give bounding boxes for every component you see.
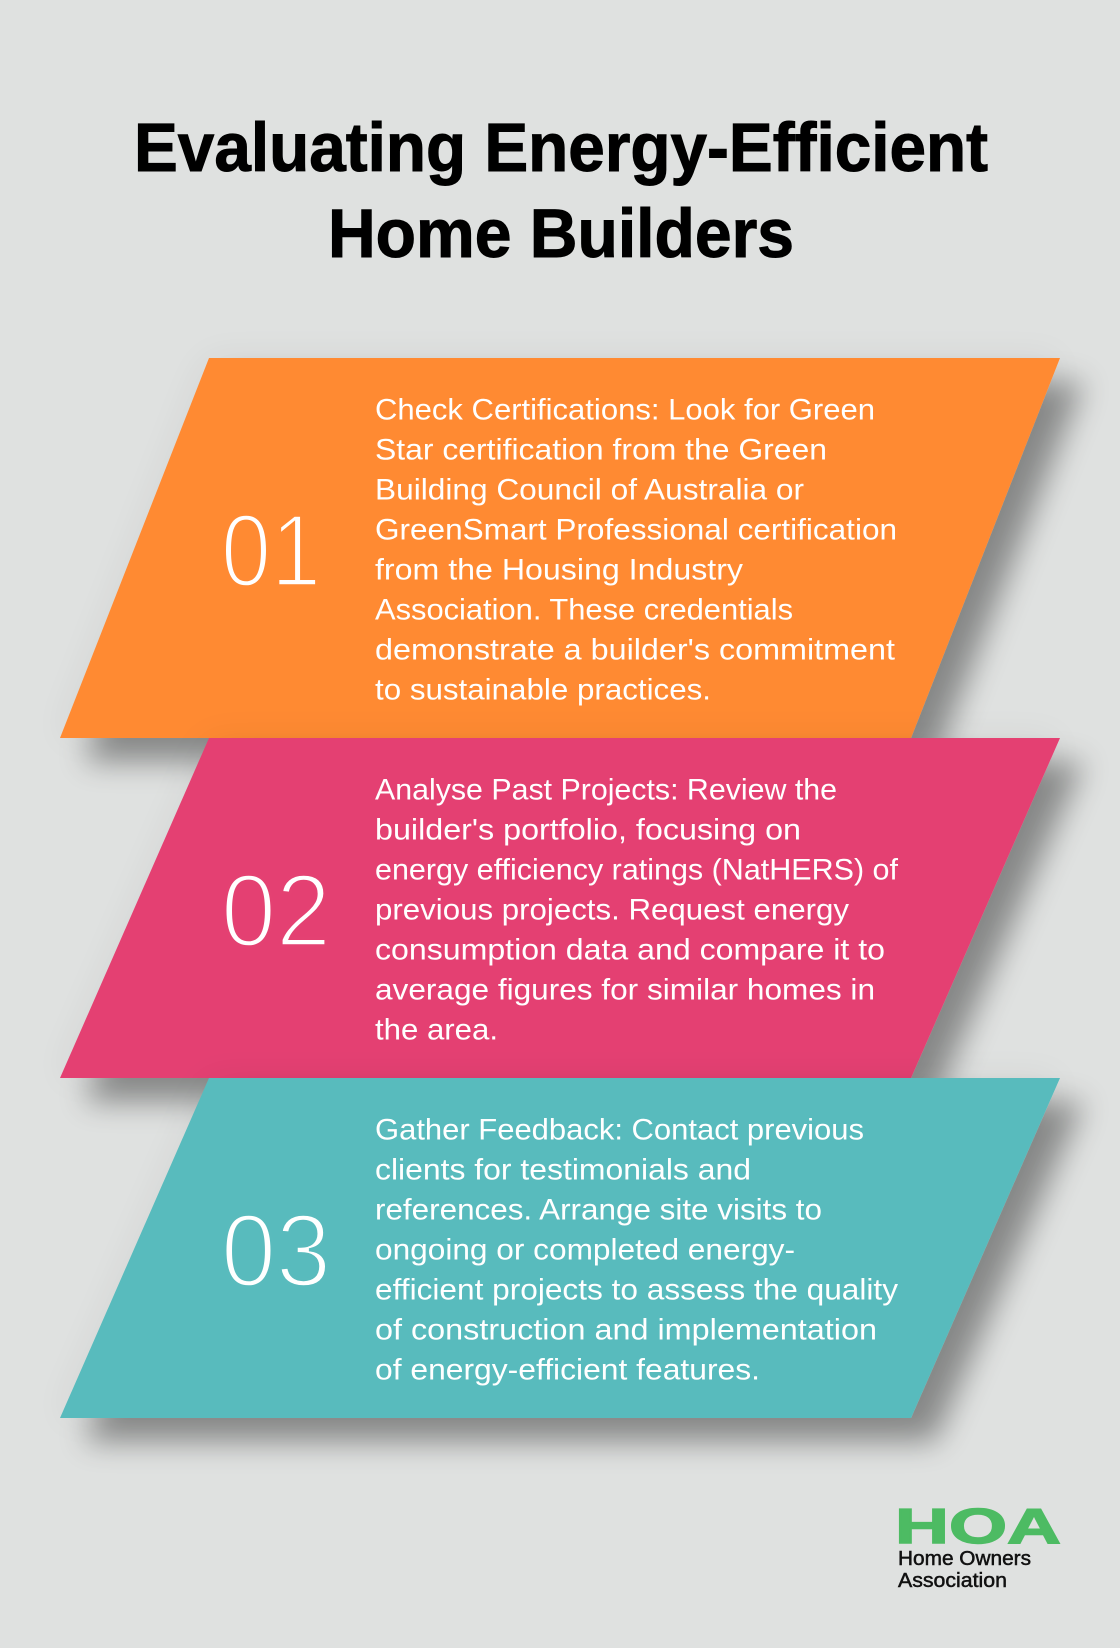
- logo: Home Owners Association: Association: [898, 1570, 1007, 1592]
- text: gather feedback: ongoing or completed energy-: [375, 1234, 795, 1266]
- logo: Home Owners Association: HOA: [895, 1500, 1061, 1554]
- text: analyse past projects: [375, 774, 899, 1046]
- text: analyse past projects: the area.: [375, 1014, 498, 1046]
- text: gather feedback: of energy-efficient features.: [375, 1354, 760, 1386]
- text: check certifications: Check Certifications: Look for Green: [375, 394, 875, 426]
- text: check certifications: GreenSmart Professional certification: [375, 514, 897, 546]
- text: check certifications: demonstrate a builder's commitment: [375, 634, 895, 666]
- text: analyse past projects: average figures for similar homes in: [375, 974, 875, 1006]
- number 02: 02: [221, 853, 331, 968]
- text: analyse past projects: consumption data and compare it to: [375, 934, 885, 966]
- text: check certifications: Building Council of Australia or: [375, 474, 804, 506]
- text: check certifications: Star certification from the Green: [375, 434, 827, 466]
- title: [134, 109, 988, 272]
- text: gather feedback: references. Arrange site visits to: [375, 1194, 822, 1226]
- panel: step 02 analyse past projects: [60, 738, 1060, 1078]
- text: check certifications: [375, 394, 897, 706]
- text: analyse past projects: builder's portfolio, focusing on: [375, 814, 801, 846]
- text: check certifications: to sustainable practices.: [375, 674, 711, 706]
- text: check certifications: Association. These credentials: [375, 594, 793, 626]
- number 01: 01: [221, 493, 321, 608]
- title: Home Builders: [328, 195, 794, 272]
- panel: step 01 check certifications: [60, 358, 1060, 738]
- text: gather feedback: efficient projects to assess the quality: [375, 1274, 898, 1306]
- text: gather feedback: Gather Feedback: Contact previous: [375, 1114, 864, 1146]
- orange parallelogram: [60, 358, 1060, 738]
- pink parallelogram: [60, 738, 1060, 1078]
- teal parallelogram: [60, 1078, 1060, 1418]
- text: gather feedback: of construction and implementation: [375, 1314, 877, 1346]
- number 03: 03: [221, 1193, 331, 1308]
- logo: Home Owners Association: [895, 1500, 1061, 1592]
- panel: step 03 gather feedback: [60, 1078, 1060, 1418]
- text: analyse past projects: energy efficiency ratings (NatHERS) of: [375, 854, 899, 886]
- text: analyse past projects: Analyse Past Projects: Review the: [375, 774, 837, 806]
- text: check certifications: from the Housing Industry: [375, 554, 743, 586]
- title: Evaluating Energy-Efficient: [134, 109, 988, 186]
- logo: Home Owners Association: Home Owners: [898, 1548, 1031, 1570]
- text: analyse past projects: previous projects. Request energy: [375, 894, 849, 926]
- text: gather feedback: [375, 1114, 898, 1386]
- text: gather feedback: clients for testimonials and: [375, 1154, 751, 1186]
